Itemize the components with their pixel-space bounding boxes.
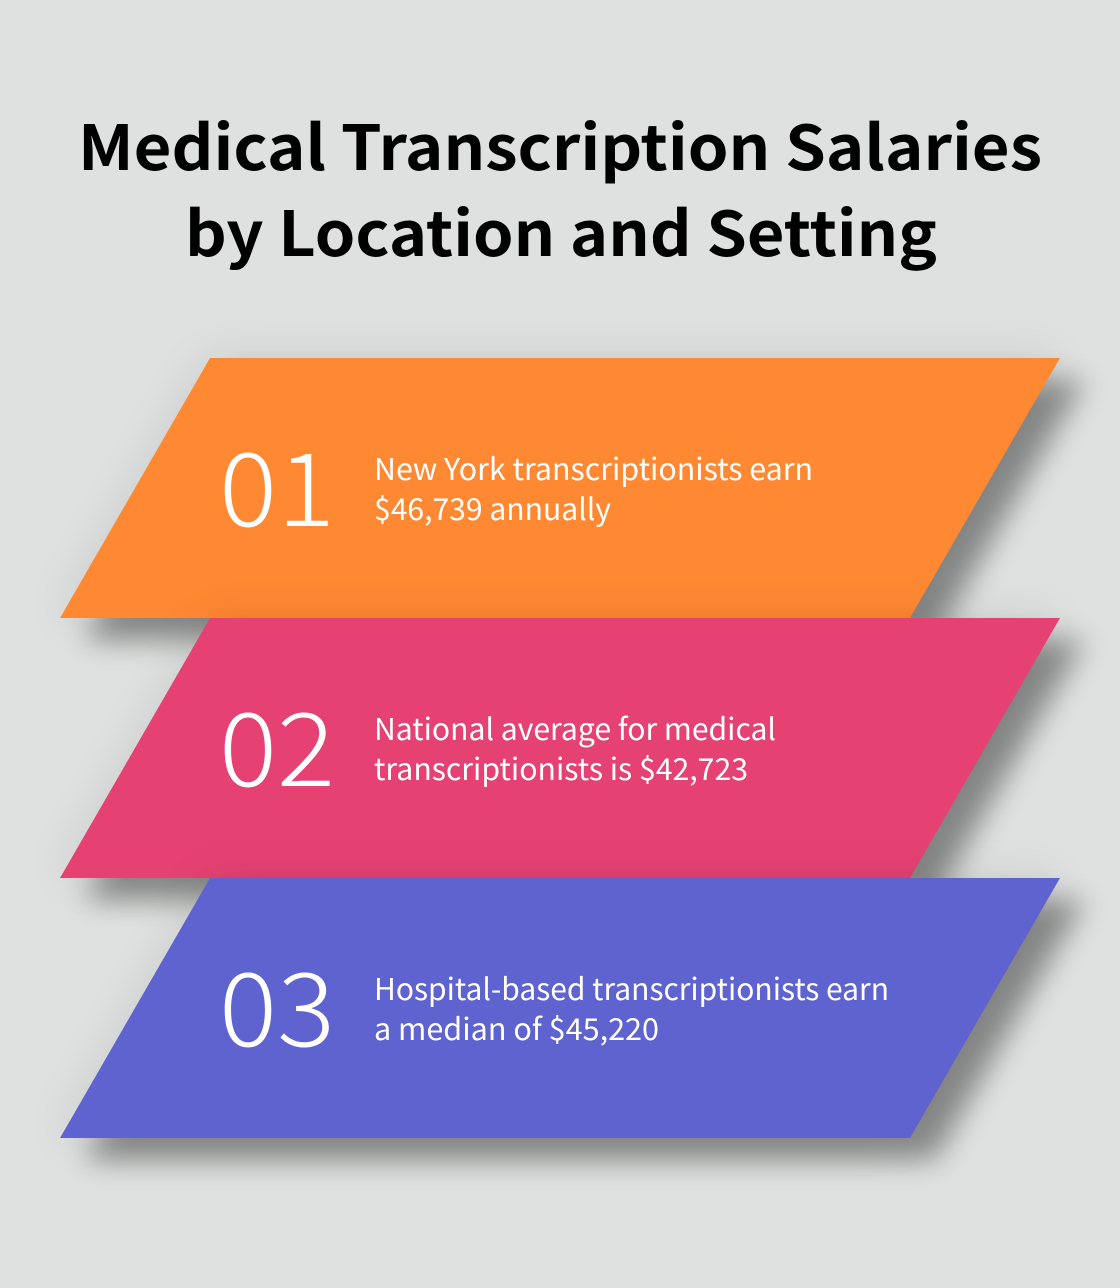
description 02: transcriptionists is $42,723 [374, 745, 748, 789]
description 01: $46,739 annually [374, 485, 611, 529]
description 03: a median of $45,220 [374, 1005, 659, 1049]
title: by Location and Setting [185, 184, 937, 274]
description 03: Hospital-based transcriptionists earn [374, 965, 889, 1009]
banner: blue [60, 878, 1060, 1138]
panel: step 02 National average [60, 618, 1085, 900]
number 01: 01 [219, 409, 335, 556]
banner: orange [60, 358, 1060, 618]
description 02: National average for medical [374, 705, 776, 749]
description 01 [374, 445, 813, 529]
description 02 [374, 705, 776, 789]
panel: step 01 New York [60, 358, 1085, 640]
number 02: 02 [219, 669, 335, 816]
banner: pink [60, 618, 1060, 878]
description 03 [374, 965, 889, 1049]
title: Medical Transcription Salaries [78, 98, 1042, 188]
number 03: 03 [219, 929, 335, 1076]
panel: step 03 Hospital-based [60, 878, 1085, 1160]
description 01: New York transcriptionists earn [374, 445, 813, 489]
title [78, 98, 1042, 274]
